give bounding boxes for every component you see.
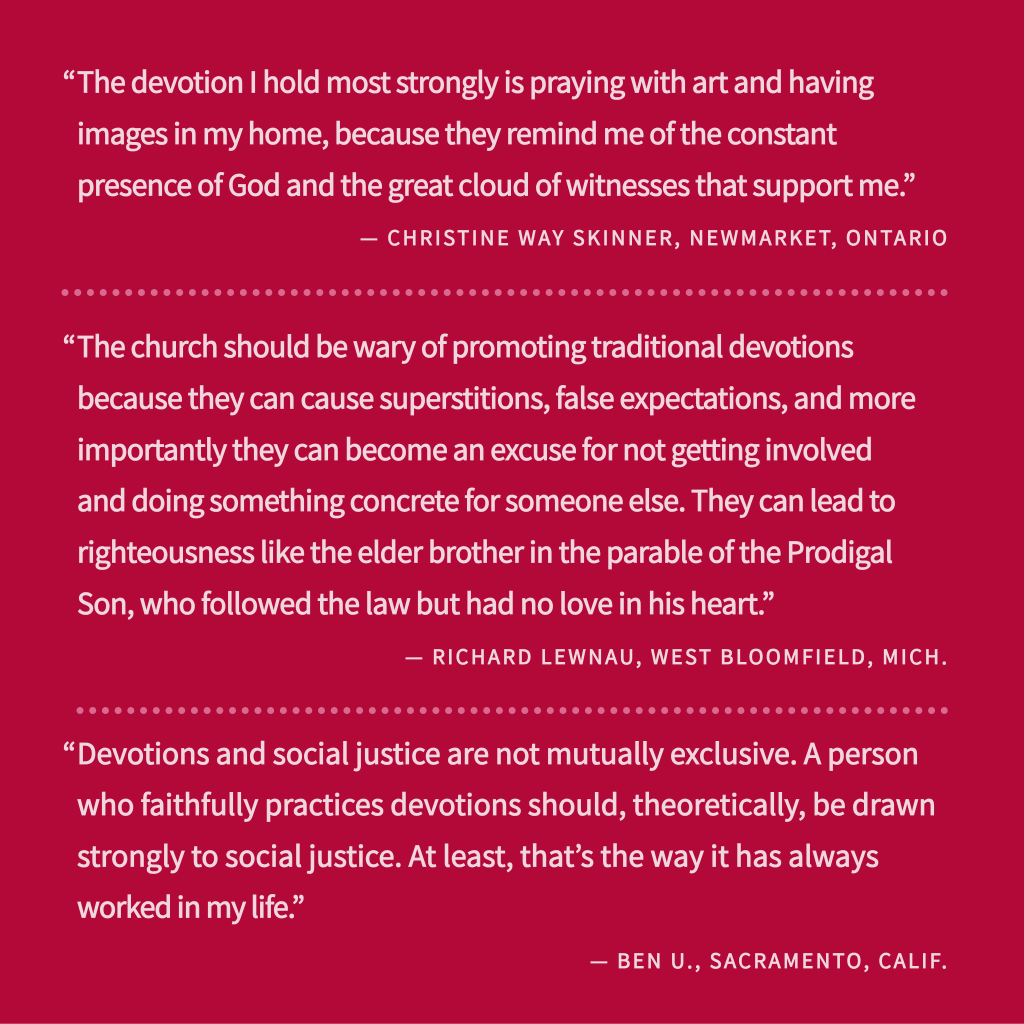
- quote 1: Christine Way Skinner: “: [62, 61, 76, 102]
- dotted divider 1: [65, 289, 945, 296]
- quote 2: Richard Lewnau: [62, 325, 947, 670]
- quote 3: Ben U.: worked in my life.”: [77, 886, 305, 926]
- quote 2: Richard Lewnau: The church should be wary of promoting traditional devotions: [77, 325, 854, 366]
- quote 2: Richard Lewnau: righteousness like the elder brother in the parable of the Prodigal: [77, 531, 893, 572]
- quote 3: Ben U.: Devotions and social justice are not mutually exclusive. A person: [77, 732, 919, 773]
- quote 2: Richard Lewnau: importantly they can become an excuse for not getting involved: [77, 428, 873, 469]
- quote 1: Christine Way Skinner: [62, 61, 947, 251]
- attribution 1: — CHRISTINE WAY SKINNER, NEWMARKET, ONTARIO: [360, 222, 947, 251]
- attribution 3: — BEN U., SACRAMENTO, CALIF.: [590, 945, 947, 974]
- quote 1: Christine Way Skinner: images in my home, because they remind me of the constant: [77, 112, 837, 153]
- quote 2: Richard Lewnau: Son, who followed the law but had no love in his heart.”: [77, 582, 775, 623]
- quote 3: Ben U.: who faithfully practices devotions should, theoretically, be drawn: [77, 783, 936, 824]
- quote 2: Richard Lewnau: “: [62, 325, 76, 366]
- quote 2: Richard Lewnau: because they can cause superstitions, false expectations, and more: [77, 377, 916, 418]
- attribution 2: — RICHARD LEWNAU, WEST BLOOMFIELD, MICH.: [405, 641, 947, 670]
- quote 3: Ben U.: [62, 732, 947, 974]
- quote 2: Richard Lewnau: and doing something concrete for someone else. They can lead to: [77, 479, 896, 520]
- quote 1: Christine Way Skinner: The devotion I hold most strongly is praying with art and having: [77, 61, 874, 102]
- dotted divider 2: [80, 707, 945, 714]
- quote 3: Ben U.: strongly to social justice. At least, that’s the way it has always: [77, 834, 879, 875]
- quote 1: Christine Way Skinner: presence of God and the great cloud of witnesses that support me.”: [77, 163, 916, 204]
- quote 3: Ben U.: “: [62, 732, 76, 773]
